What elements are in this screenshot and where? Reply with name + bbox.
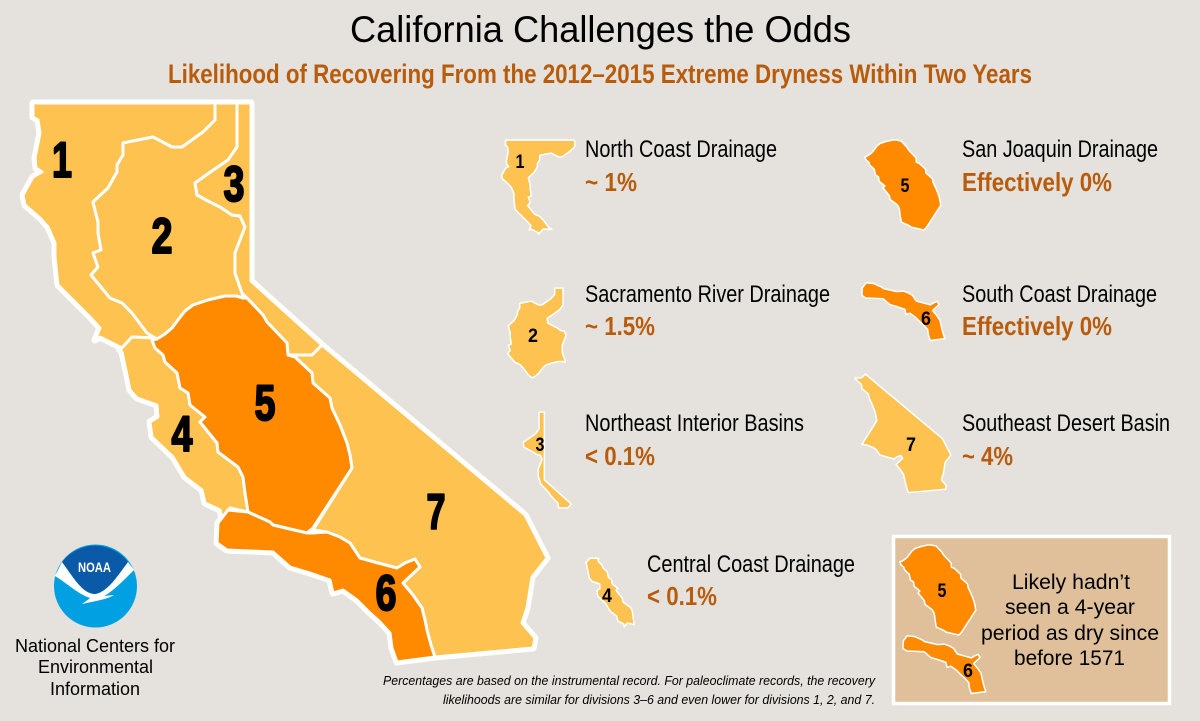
item: Central Coast Drainage: Central Coast Drainage	[647, 551, 855, 578]
item: Central Coast Drainage	[586, 551, 855, 627]
icon: division 1	[502, 140, 575, 234]
map numbers: 5	[254, 375, 276, 431]
callout text: before 1571	[1014, 647, 1125, 670]
icon: division 6	[903, 636, 986, 694]
map numbers: 2	[152, 208, 172, 264]
division 7	[295, 345, 547, 657]
item: Sacramento River Drainage: Sacramento River Drainage	[585, 281, 830, 308]
item: South Coast Drainage: 6	[921, 309, 931, 330]
map: California hydrologic divisions	[23, 103, 547, 662]
map numbers	[52, 132, 446, 621]
state outline	[23, 103, 547, 662]
callout box: since 1571	[894, 536, 1170, 704]
map numbers: 7	[426, 484, 446, 540]
item: North Coast Drainage: 1	[516, 152, 525, 173]
subtitle: Likelihood of Recovering From the 2012–2015 Extreme Dryness Within Two Years	[168, 59, 1032, 89]
organisation name: National Centers for	[15, 636, 175, 656]
title: California Challenges the Odds	[350, 9, 851, 50]
item: Southeast Desert Basin	[855, 374, 1170, 493]
map numbers: 6	[376, 565, 396, 621]
callout text	[981, 571, 1159, 670]
division 4	[120, 337, 248, 518]
item: Central Coast Drainage: < 0.1%	[647, 581, 717, 611]
item: Southeast Desert Basin: ~ 4%	[962, 441, 1013, 471]
item: South Coast Drainage: Effectively 0%	[962, 311, 1112, 341]
callout box: since 1571: 5	[938, 581, 947, 602]
item: San Joaquin Drainage	[865, 136, 1158, 230]
callout text: Likely hadn’t	[1012, 571, 1130, 594]
logo: NOAA: NOAA	[78, 559, 111, 575]
item: North Coast Drainage: ~ 1%	[585, 167, 637, 197]
icon: division 5	[865, 140, 941, 230]
division 1	[23, 103, 215, 350]
item: Sacramento River Drainage	[508, 281, 830, 378]
division 2	[91, 103, 245, 339]
footnote: likelihoods are similar for divisions 3–6 and even lower for divisions 1, 2, and 7.	[443, 693, 875, 707]
organisation name	[15, 636, 175, 699]
icon: division 3	[523, 412, 571, 508]
item: San Joaquin Drainage: 5	[900, 176, 910, 197]
icon: division 4	[586, 558, 634, 627]
item: Northeast Interior Basins: 3	[536, 435, 544, 456]
item: Northeast Interior Basins: < 0.1%	[585, 441, 655, 471]
division 5	[152, 296, 352, 533]
map numbers: 4	[172, 406, 193, 462]
icon: division 2	[508, 288, 566, 378]
item: Sacramento River Drainage: ~ 1.5%	[585, 311, 655, 341]
item: South Coast Drainage	[862, 281, 1157, 341]
item: Northeast Interior Basins	[523, 410, 804, 508]
item: Sacramento River Drainage: 2	[528, 326, 538, 347]
callout box: since 1571: 6	[963, 661, 973, 682]
icon: division 7	[855, 374, 951, 493]
icon: division 5	[900, 545, 976, 635]
callout text: seen a 4-year	[1005, 596, 1135, 619]
organisation name: Environmental	[38, 657, 153, 677]
item: North Coast Drainage: North Coast Drainage	[585, 136, 777, 163]
footnote: Percentages are based on the instrumental record. For paleoclimate records, the recovery	[383, 674, 876, 688]
item: Northeast Interior Basins: Northeast Interior Basins	[585, 410, 804, 437]
map numbers: 3	[224, 156, 244, 212]
map numbers: 1	[52, 132, 72, 188]
item: Southeast Desert Basin: 7	[906, 435, 916, 456]
item: San Joaquin Drainage: San Joaquin Drainage	[962, 136, 1158, 163]
division 6	[217, 510, 435, 662]
division 3	[195, 103, 322, 355]
item: Central Coast Drainage: 4	[602, 586, 612, 607]
callout text: period as dry since	[981, 622, 1159, 645]
organisation name: Information	[50, 679, 140, 699]
logo: NOAA	[54, 544, 137, 628]
item: South Coast Drainage: South Coast Drainage	[962, 281, 1157, 308]
footnote	[383, 674, 876, 707]
item: North Coast Drainage	[502, 136, 777, 234]
icon: division 6	[862, 283, 945, 341]
item: San Joaquin Drainage: Effectively 0%	[962, 167, 1112, 197]
